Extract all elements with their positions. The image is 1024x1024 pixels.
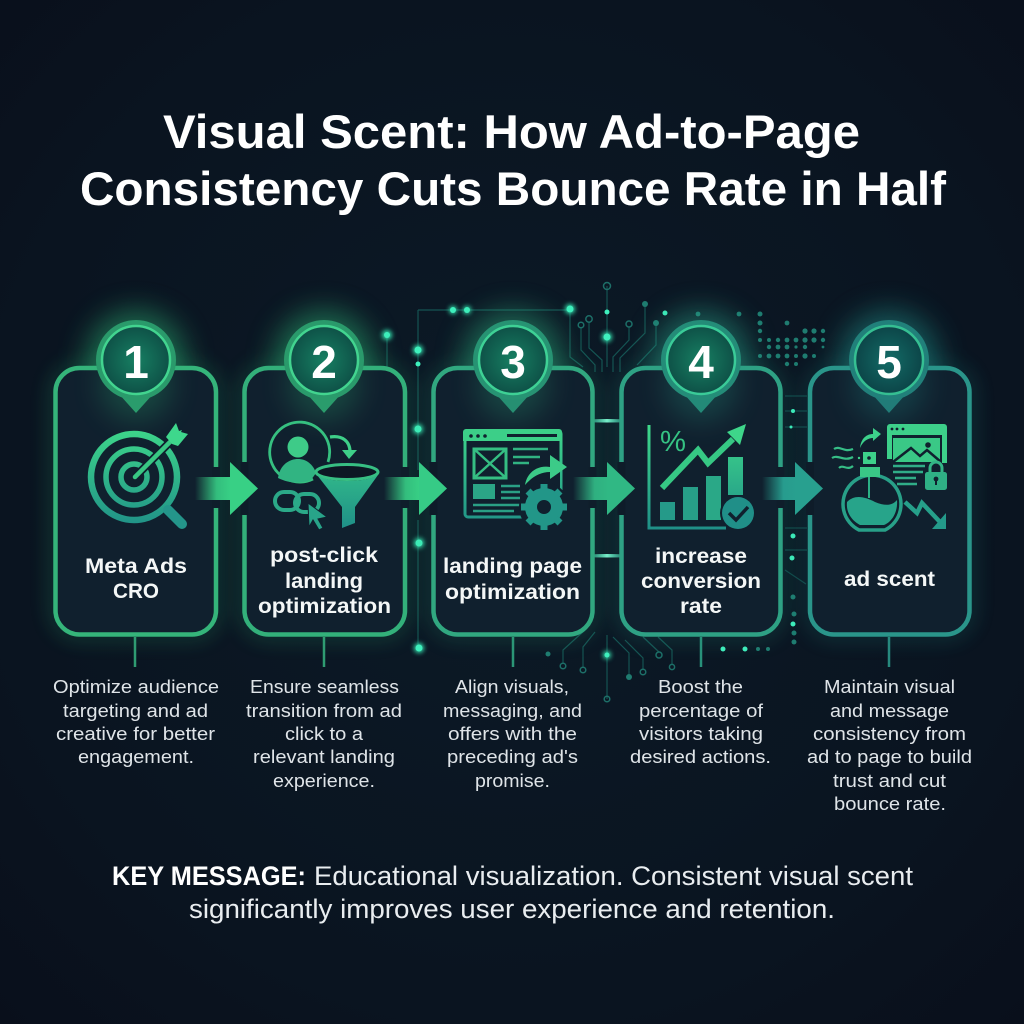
description 2: experience.	[273, 770, 375, 791]
description 3: Align visuals,	[455, 676, 569, 697]
arrow 4 to 5	[762, 462, 823, 515]
label: landing page	[443, 554, 582, 578]
description 5	[807, 676, 972, 814]
label: ad scent	[844, 567, 935, 591]
badge 4	[661, 320, 741, 413]
key message: Educational visualization. Consistent visual scent	[314, 861, 913, 891]
icon: user, link, cursor and funnel	[270, 422, 378, 530]
description 5: Maintain visual	[824, 676, 955, 697]
description 2: Ensure seamless	[250, 676, 399, 697]
title: Consistency Cuts Bounce Rate in Half	[80, 162, 946, 215]
key message	[112, 861, 913, 924]
arrow 2 to 3	[384, 462, 447, 515]
label: optimization	[445, 580, 580, 604]
description 4: desired actions.	[630, 746, 771, 767]
description 1	[53, 676, 219, 767]
badge 1	[96, 320, 176, 413]
description 3	[443, 676, 582, 791]
icon: perfume bottle, browser, lock and downward arrow	[832, 424, 947, 530]
title: Visual Scent: How Ad-to-Page	[163, 105, 860, 158]
icon: growth chart with percent and check: %	[660, 426, 686, 458]
title	[80, 105, 946, 215]
description 4: Boost the	[658, 676, 743, 697]
description 3: messaging, and	[443, 700, 582, 721]
badge 4: 4	[688, 336, 714, 388]
badge 2	[284, 320, 364, 413]
description 1: engagement.	[78, 746, 194, 767]
label: CRO	[113, 579, 159, 603]
key message: significantly improves user experience and retention.	[189, 894, 835, 924]
description 3: promise.	[475, 770, 550, 791]
badge 5	[849, 320, 929, 413]
label: post-click	[270, 543, 378, 567]
arrow 1 to 2	[195, 462, 258, 515]
label	[641, 544, 761, 618]
label	[85, 554, 187, 603]
panel 3: landing page optimization	[434, 310, 592, 667]
description 5: ad to page to build	[807, 746, 972, 767]
description 2: relevant landing	[253, 746, 395, 767]
panel 1: Meta Ads CRO	[56, 310, 216, 667]
description 3: offers with the	[448, 723, 577, 744]
panel 5: ad scent	[810, 310, 970, 667]
description 5: and message	[830, 700, 949, 721]
description 2: click to a	[285, 723, 364, 744]
badge 2: 2	[311, 336, 337, 388]
label	[258, 543, 391, 618]
label: conversion	[641, 569, 761, 593]
description 5: consistency from	[813, 723, 966, 744]
label: Meta Ads	[85, 554, 187, 578]
label: increase	[655, 544, 747, 568]
icon: growth chart with percent and check	[649, 424, 756, 531]
key message: KEY MESSAGE:	[112, 861, 306, 891]
description 4	[630, 676, 771, 767]
description 1: Optimize audience	[53, 676, 219, 697]
description 1: creative for better	[56, 723, 215, 744]
label	[443, 554, 582, 604]
description 2: transition from ad	[246, 700, 402, 721]
badge 1: 1	[123, 336, 149, 388]
description 1: targeting and ad	[63, 700, 208, 721]
badge 3	[473, 320, 553, 413]
description 2	[246, 676, 402, 791]
label: landing	[285, 569, 363, 593]
label: optimization	[258, 594, 391, 618]
description 5: trust and cut	[833, 770, 946, 791]
icon: browser page with arrow and gear	[463, 429, 569, 532]
description 5: bounce rate.	[834, 793, 946, 814]
description 3: preceding ad's	[447, 746, 578, 767]
badge 3: 3	[500, 336, 526, 388]
badge 5: 5	[876, 336, 902, 388]
label: rate	[680, 594, 722, 618]
circuit decoration background	[382, 282, 825, 702]
icon: target with arrow and magnifier	[91, 423, 188, 524]
description 4: visitors taking	[639, 723, 763, 744]
description 4: percentage of	[639, 700, 764, 721]
arrow 3 to 4	[573, 462, 635, 515]
panel 2: post-click landing optimization	[244, 310, 405, 667]
panel 4: increase conversion rate	[622, 310, 780, 667]
